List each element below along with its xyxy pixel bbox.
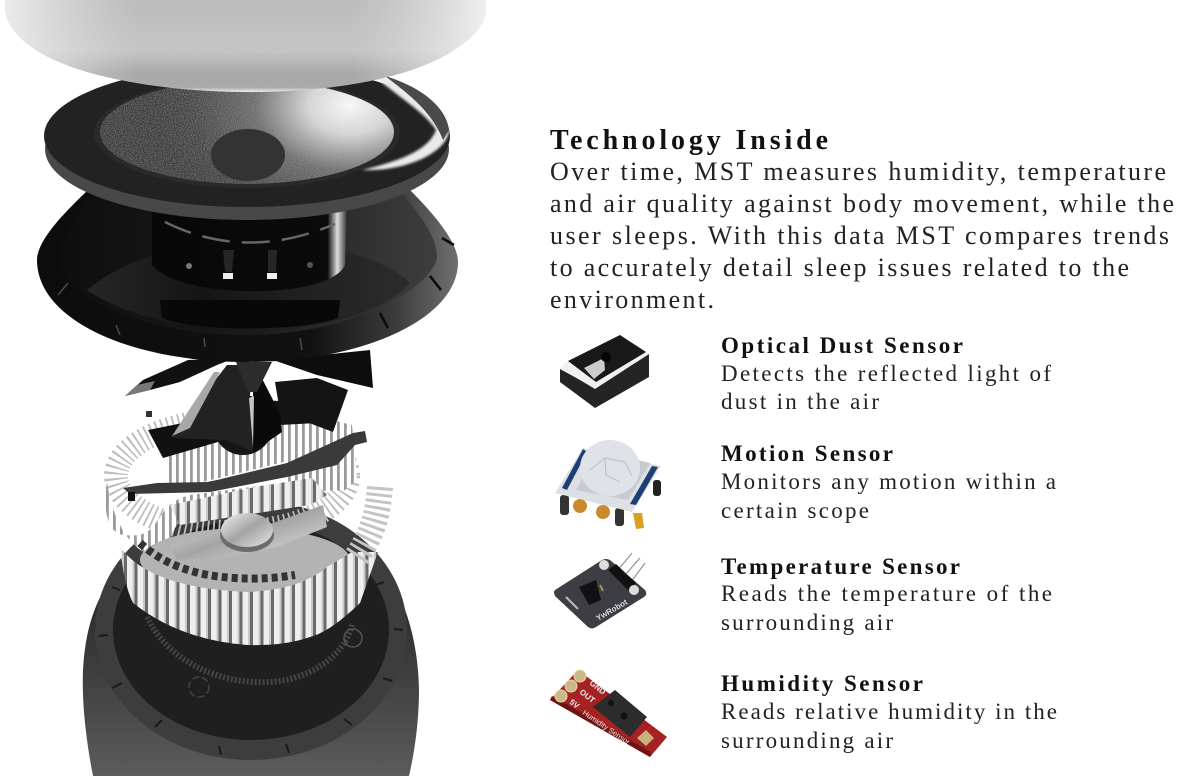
speaker disc xyxy=(44,65,450,220)
description xyxy=(721,469,1056,523)
lower black disc xyxy=(37,190,458,362)
description xyxy=(721,361,1051,414)
inner cylinder xyxy=(152,205,347,291)
dark inner edge of front ring xyxy=(140,543,295,579)
heading: Motion Sensor xyxy=(721,441,893,466)
description: surrounding air xyxy=(721,728,893,753)
icon: humidity sensor xyxy=(550,670,667,757)
icon: humidity sensor: GND xyxy=(588,678,607,697)
heading: Humidity Sensor xyxy=(721,671,923,696)
icon: motion sensor xyxy=(555,440,661,529)
dark crossbar xyxy=(123,431,367,494)
description: Monitors any motion within a xyxy=(721,469,1056,494)
base housing xyxy=(83,500,419,776)
description xyxy=(721,581,1052,635)
paragraph: Over time, MST measures humidity, temperature xyxy=(550,157,1166,186)
heat sink fins xyxy=(106,398,380,645)
heading: Optical Dust Sensor xyxy=(721,333,963,358)
description: dust in the air xyxy=(721,389,879,414)
description: surrounding air xyxy=(721,610,893,635)
description xyxy=(721,699,1057,753)
title: Technology Inside xyxy=(550,125,828,156)
paragraph: user sleeps. With this data MST compares trends xyxy=(550,221,1169,250)
description: Detects the reflected light of xyxy=(721,361,1051,386)
panel: temperature sensor xyxy=(554,553,1052,635)
icon: dust sensor xyxy=(560,335,649,408)
speaker cone xyxy=(94,78,400,188)
paragraph xyxy=(550,157,1174,314)
front vertical fins xyxy=(120,547,378,645)
inner lens surface xyxy=(87,240,410,331)
black mounting plates xyxy=(148,398,317,458)
center metal floor xyxy=(140,528,350,592)
icon: humidity sensor: Humidity Sensor xyxy=(581,708,632,747)
panel: humidity sensor xyxy=(550,670,1057,757)
panel: motion sensor xyxy=(555,440,1056,529)
inner swirl ring xyxy=(106,478,325,560)
icon: temperature sensor: YwRobot xyxy=(594,597,629,623)
center cap xyxy=(211,129,285,181)
panel: optical dust sensor xyxy=(560,333,1051,414)
top dome shell xyxy=(5,0,486,92)
description: Reads the temperature of the xyxy=(721,581,1052,606)
icon: humidity sensor: OUT xyxy=(578,687,597,705)
icon: humidity sensor: 5V xyxy=(568,697,582,711)
panel: technology text xyxy=(550,125,1174,314)
icon: temperature sensor xyxy=(554,553,646,628)
panel: exploded product illustration xyxy=(5,0,486,776)
paragraph: and air quality against body movement, while the xyxy=(550,189,1174,218)
description: certain scope xyxy=(721,498,869,523)
right radial fins xyxy=(356,487,380,558)
paragraph: environment. xyxy=(550,285,714,314)
upper radial ring xyxy=(116,420,348,532)
center metal disc xyxy=(220,518,274,552)
description: Reads relative humidity in the xyxy=(721,699,1057,724)
fan blades xyxy=(125,350,373,455)
paragraph: to accurately detail sleep issues related to the xyxy=(550,253,1129,282)
heading: Temperature Sensor xyxy=(721,554,960,579)
